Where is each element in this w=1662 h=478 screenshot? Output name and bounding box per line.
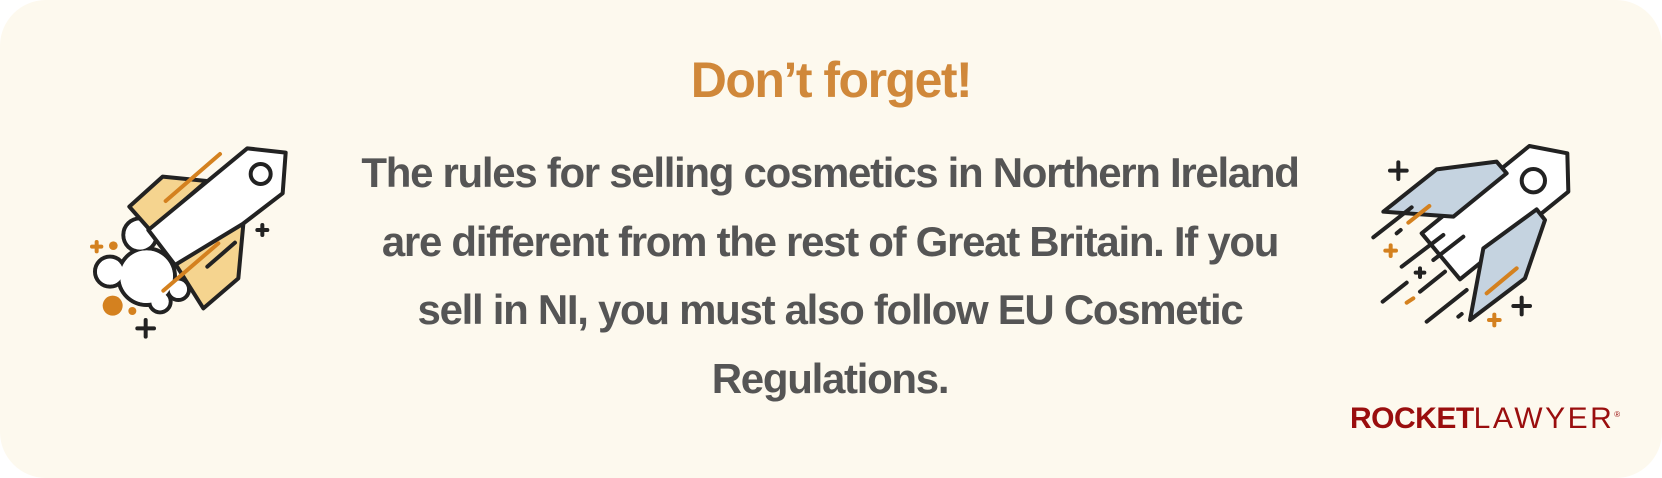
text block: main message: [361, 149, 1299, 402]
logo: Rocket Lawyer: ROCKETLAWYER®: [1350, 402, 1620, 435]
text block: main message: sell in NI, you must also follow EU Cosmetic: [418, 286, 1242, 333]
icon: left rocket: [90, 146, 288, 339]
title: Don’t forget!: [691, 52, 971, 108]
text block: main message: The rules for selling cosmetics in Northern Ireland: [361, 149, 1299, 196]
text block: main message: are different from the rest of Great Britain. If you: [382, 218, 1278, 264]
text block: main message: Regulations.: [712, 354, 948, 402]
icon: right rocket: [1371, 144, 1570, 328]
